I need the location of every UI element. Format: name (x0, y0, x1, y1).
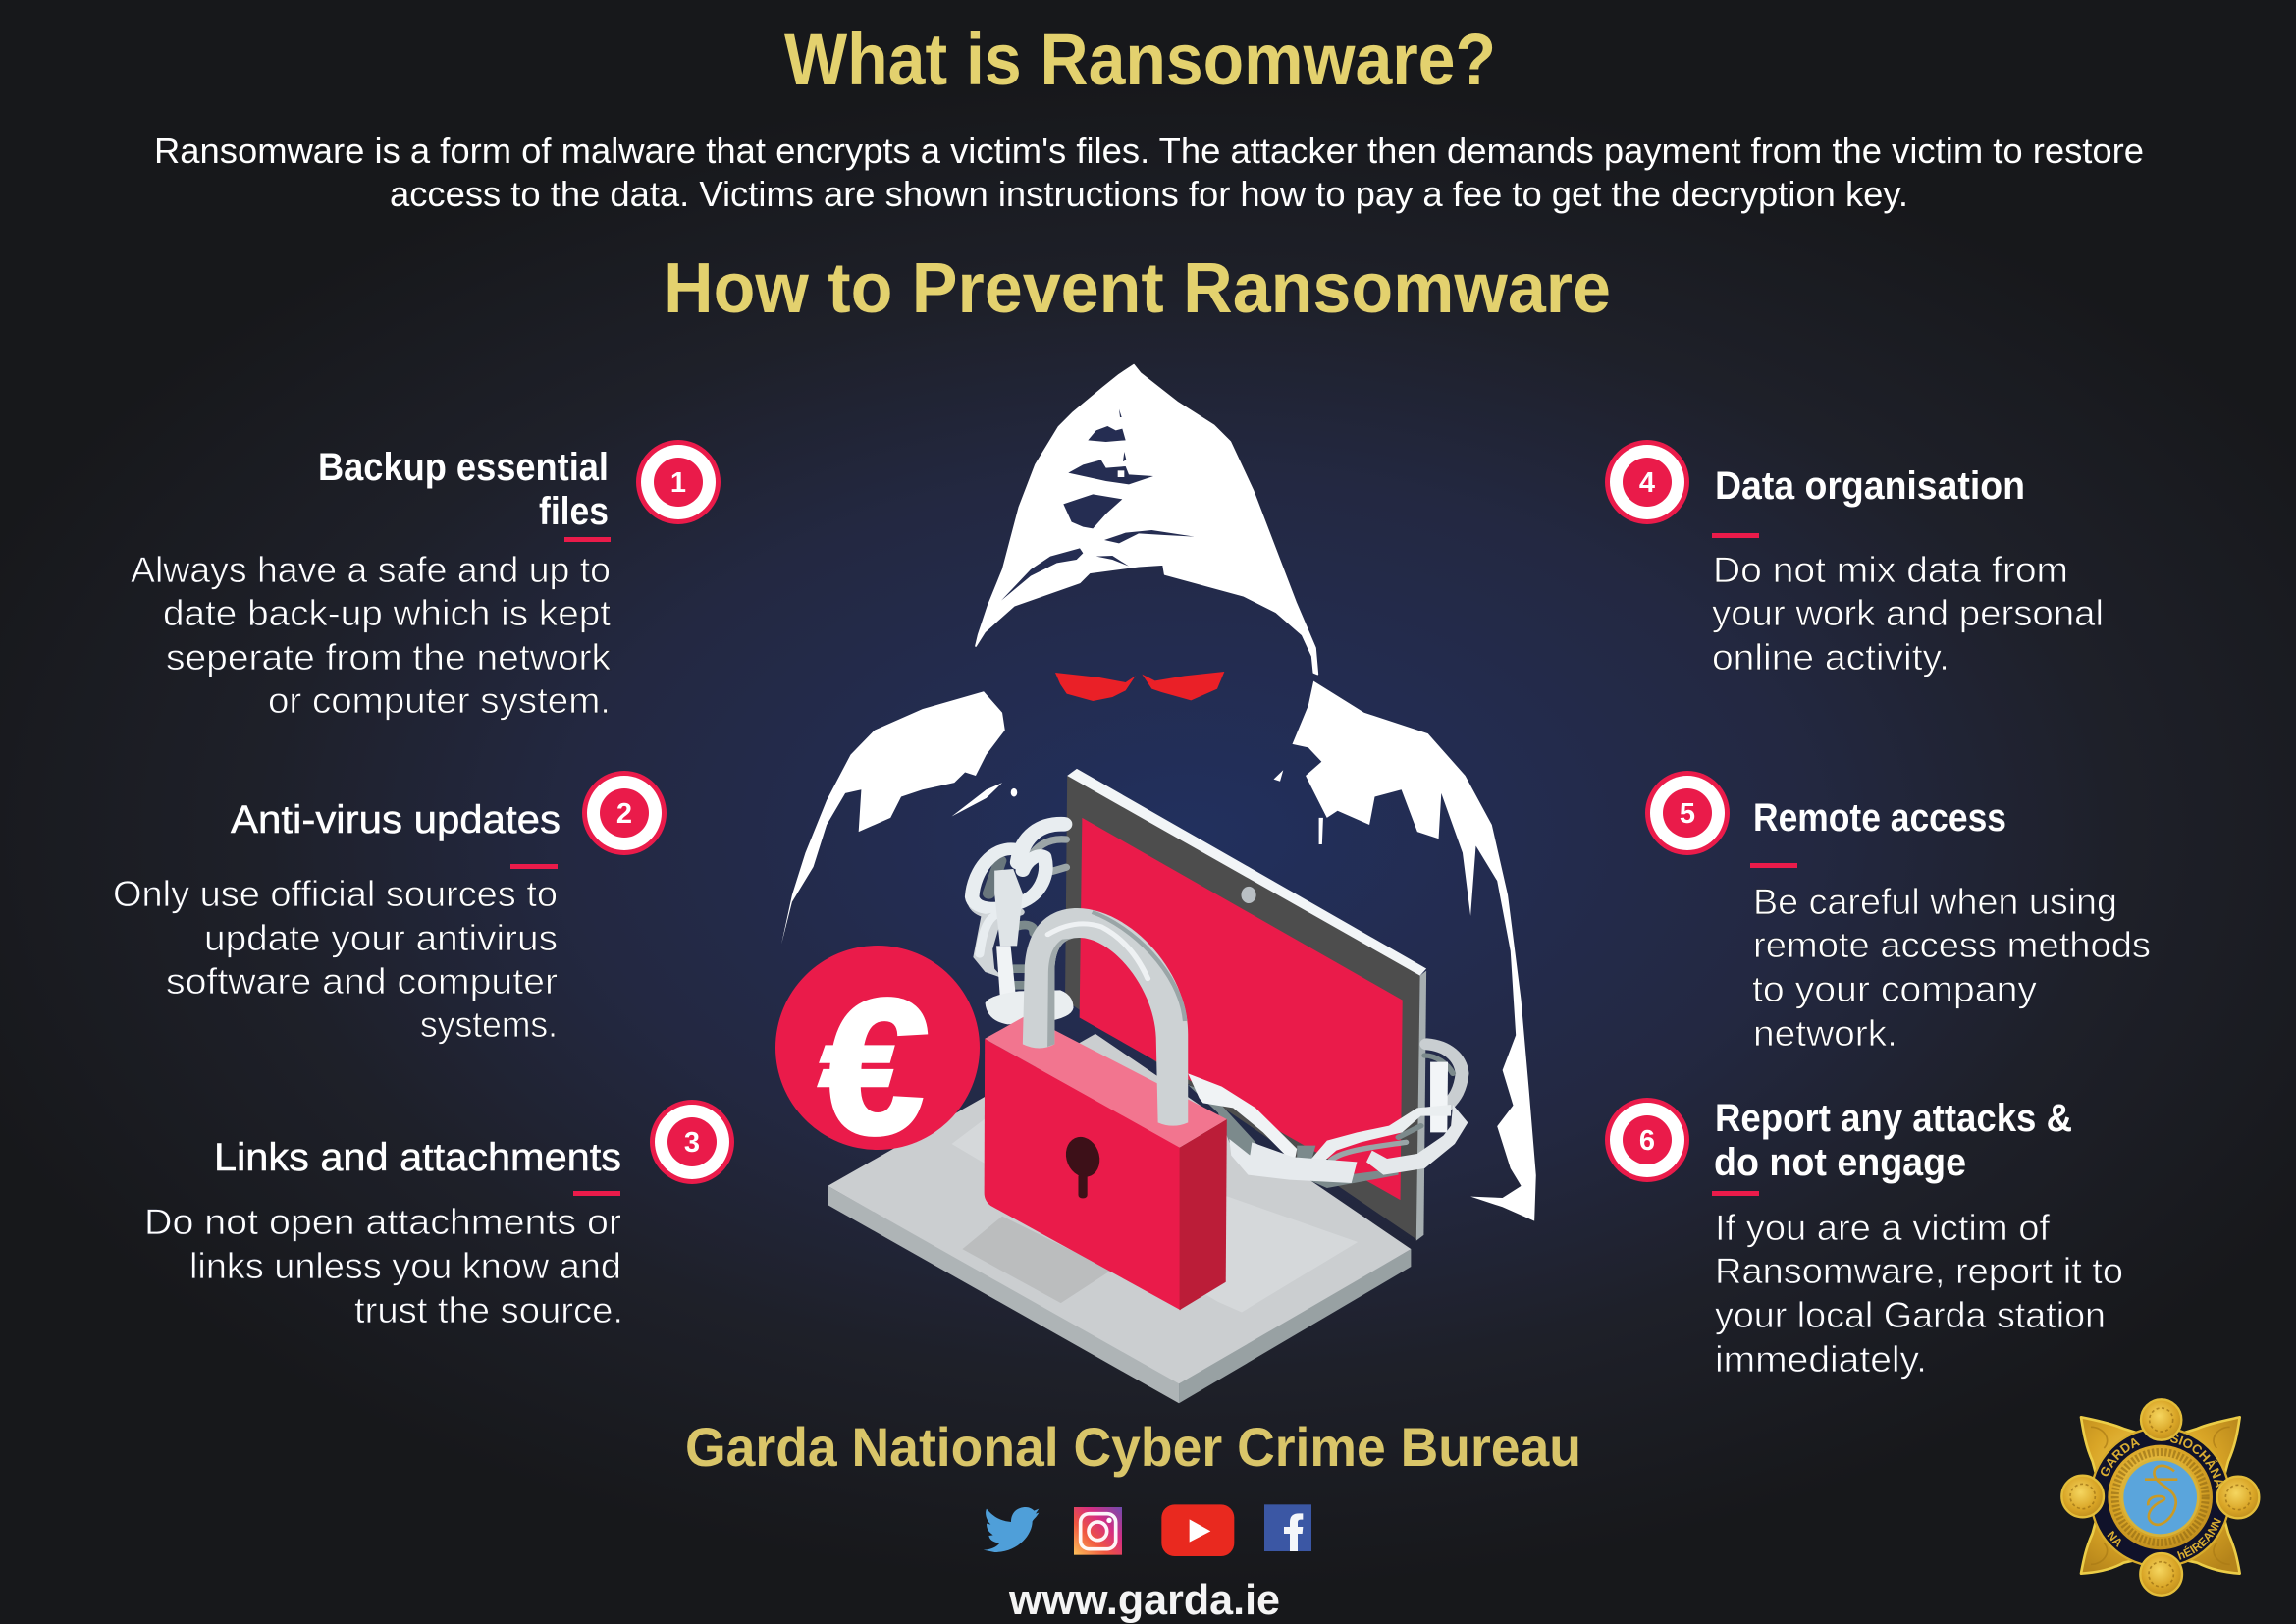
icon: facebook (1264, 1504, 1311, 1551)
padlock body (985, 1015, 1227, 1310)
heading: Backup essential (318, 446, 609, 489)
body text: to your company (1752, 969, 2038, 1009)
panel: backup essential files (131, 440, 721, 721)
badge 2 (582, 771, 667, 855)
hacker shoulders (781, 681, 1536, 1221)
body text: systems. (420, 1004, 558, 1045)
body text: your work and personal (1712, 593, 2104, 633)
panel: links and attachments (144, 1100, 734, 1330)
intro paragraph: access to the data. Victims are shown instructions for how to pay a fee to get the decryption key. (390, 174, 1908, 214)
panel: data organisation (1605, 440, 2104, 677)
body text: date back-up which is kept (163, 593, 612, 633)
body text: immediately. (1715, 1339, 1927, 1380)
chain (972, 824, 1468, 1188)
body text: Do not mix data from (1713, 550, 2068, 590)
website url: www.garda.ie (1008, 1576, 1280, 1624)
badge 3 (650, 1100, 734, 1184)
euro coin (775, 946, 980, 1174)
footer: bureau name: Garda National Cyber Crime Bureau (685, 1416, 1581, 1478)
heading: Links and attachments (214, 1136, 621, 1179)
heading: Data organisation (1715, 464, 2025, 508)
red eyes (1055, 672, 1224, 701)
body text: Be careful when using (1753, 882, 2117, 922)
panel: anti-virus updates (113, 771, 667, 1045)
body text: remote access methods (1753, 925, 2151, 965)
badge 5: 5 (1680, 798, 1695, 830)
body text (131, 550, 612, 721)
intro paragraph (154, 131, 2144, 214)
body text (1752, 882, 2151, 1054)
heading: how to prevent: How to Prevent Ransomware (664, 249, 1611, 328)
icon: youtube (1161, 1504, 1234, 1556)
body text: online activity. (1712, 637, 1949, 677)
badge 2: 2 (616, 798, 632, 830)
euro coin: € (811, 958, 936, 1174)
social icons (984, 1504, 1311, 1556)
title: What is Ransomware? (784, 19, 1496, 100)
body text: update your antivirus (204, 918, 558, 958)
body text: trust the source. (354, 1290, 623, 1330)
garda crest badge: hÉIREANN (2177, 1518, 2221, 1560)
icon: twitter (984, 1507, 1039, 1552)
illustration: hacker, laptop and padlock (775, 365, 1536, 1403)
garda crest badge: GARDA (2101, 1437, 2140, 1477)
badge 1 (636, 440, 721, 524)
body text: links unless you know and (189, 1246, 621, 1286)
garda crest badge (2060, 1398, 2260, 1597)
heading: do not engage (1714, 1141, 1966, 1184)
badge 3: 3 (684, 1127, 700, 1159)
garda crest badge: NA (2107, 1530, 2121, 1547)
body text: your local Garda station (1715, 1295, 2106, 1335)
body text (113, 874, 558, 1045)
body text: Ransomware, report it to (1715, 1251, 2123, 1291)
badge 6: 6 (1639, 1125, 1655, 1157)
heading (1714, 1097, 2072, 1184)
garda crest badge: SÍOCHÁNA (2170, 1434, 2224, 1489)
body text: Do not open attachments or (144, 1202, 621, 1242)
heading: Anti-virus updates (231, 798, 561, 841)
body text (1715, 1208, 2123, 1380)
heading (318, 446, 609, 533)
heading: Report any attacks & (1715, 1097, 2072, 1140)
hacker silhouette hood (976, 365, 1317, 675)
body text: seperate from the network (166, 637, 612, 677)
badge 4: 4 (1639, 467, 1655, 499)
icon: instagram (1074, 1507, 1122, 1555)
intro paragraph: Ransomware is a form of malware that encrypts a victim's files. The attacker then demands payment from the victim to restore (154, 131, 2144, 171)
heading: Remote access (1753, 796, 2006, 839)
body text: network. (1753, 1013, 1897, 1054)
padlock shackle and keyhole (1023, 908, 1188, 1198)
body text (144, 1202, 623, 1330)
laptop screen (1065, 769, 1426, 1241)
badge 4 (1605, 440, 1689, 524)
panel: remote access (1645, 771, 2151, 1054)
badge 5 (1645, 771, 1730, 855)
body text: or computer system. (268, 680, 611, 721)
panel: report attacks (1605, 1097, 2123, 1380)
body text (1712, 550, 2104, 677)
body text: If you are a victim of (1715, 1208, 2051, 1248)
badge 1: 1 (670, 467, 686, 499)
badge 6 (1605, 1098, 1689, 1182)
body text: Always have a safe and up to (131, 550, 611, 590)
body text: software and computer (166, 961, 558, 1001)
laptop base (828, 1034, 1411, 1403)
heading: files (539, 490, 609, 533)
body text: Only use official sources to (113, 874, 558, 914)
